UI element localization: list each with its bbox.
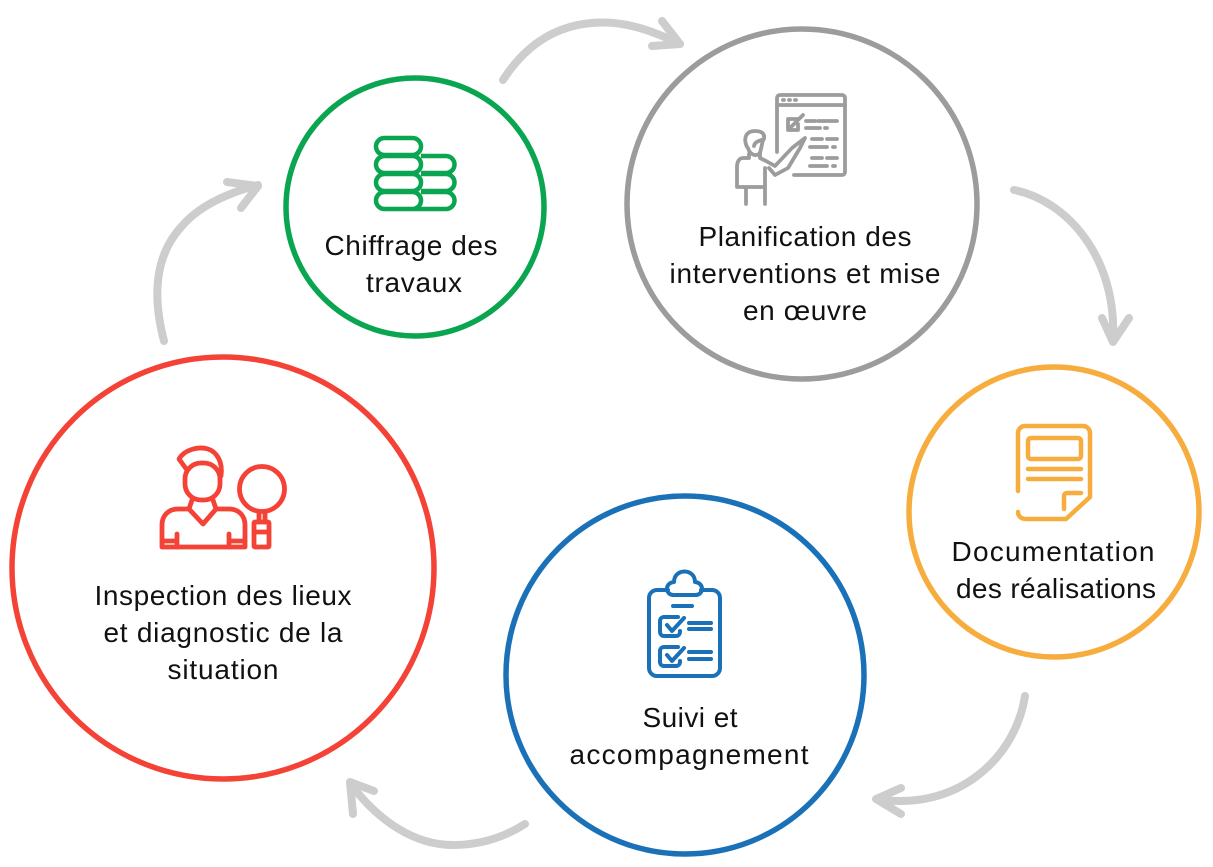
label: suivi: accompagnement (570, 739, 809, 770)
label: inspection: et diagnostic de la (104, 617, 343, 648)
arrow: documentation to suivi (876, 696, 1025, 814)
panel: inspection (12, 357, 434, 779)
label: inspection: Inspection des lieux (94, 580, 352, 611)
icon: coin stacks (376, 138, 454, 209)
arrow: suivi to inspection (350, 782, 525, 845)
panel: chiffrage des travaux (286, 78, 544, 336)
icon: clipboard checklist (649, 572, 720, 676)
label: chiffrage: travaux (366, 267, 462, 298)
arrow: inspection to chiffrage (157, 182, 258, 341)
icon: person with magnifying glass (162, 448, 284, 547)
label: documentation: Documentation (952, 536, 1154, 567)
panel: planification (627, 29, 977, 379)
icon: person presenting at a board (737, 95, 845, 204)
arrow: chiffrage to planification (503, 21, 680, 80)
label: planification: Planification des (698, 221, 912, 252)
label: planification: interventions et mise (670, 258, 940, 289)
label: documentation: des réalisations (956, 573, 1156, 604)
panel: suivi (506, 496, 864, 854)
arrow: planification to documentation (1014, 190, 1129, 342)
label: inspection: situation (168, 654, 278, 685)
label: chiffrage: Chiffrage des (324, 230, 498, 261)
panel: documentation (909, 367, 1199, 657)
icon: document (1018, 426, 1090, 519)
label: planification: en œuvre (743, 295, 867, 326)
label: suivi: Suivi et (642, 702, 738, 733)
